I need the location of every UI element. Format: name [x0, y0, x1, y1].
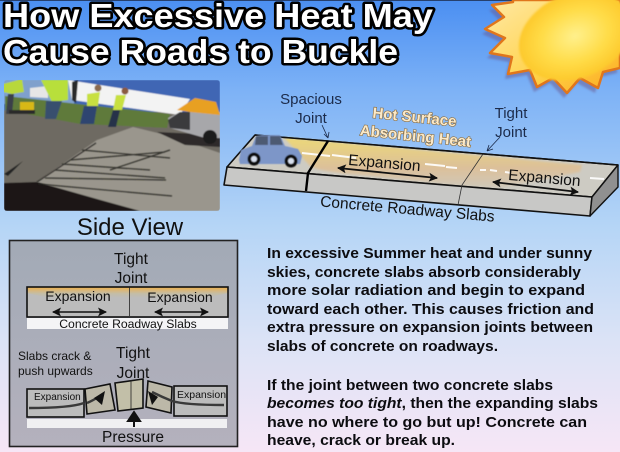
lower diagram: push upwards — [18, 364, 93, 378]
icon: sun — [482, 0, 620, 98]
expansion arrow left: Expansion — [348, 152, 421, 175]
expansion arrow right: Expansion — [508, 167, 581, 190]
explanatory text: skies, concrete slabs absorb considerably — [267, 264, 582, 281]
road top surface — [227, 135, 618, 197]
side view heading: Side View — [77, 214, 184, 241]
tight joint label: Tight — [495, 105, 528, 122]
explanatory text: more solar radiation and begin to expand — [267, 282, 585, 299]
upper diagram: Tight — [114, 251, 149, 268]
hot surface label — [359, 105, 472, 151]
lower diagram: Pressure — [102, 429, 164, 446]
tight joint label — [495, 105, 528, 141]
explanatory text — [267, 245, 598, 449]
photo: damaged road with workers — [3, 79, 220, 211]
explanatory text: toward each other. This causes friction and — [267, 301, 594, 318]
spacious joint label — [280, 91, 342, 127]
spacious joint label: Joint — [295, 110, 328, 127]
upper diagram: Expansion — [45, 288, 111, 304]
explanatory text: becomes too tight , then the expanding slabs — [267, 395, 598, 412]
hot surface label: Absorbing Heat — [359, 122, 472, 151]
pressure arrow — [128, 412, 140, 427]
lower diagram: Expansion — [34, 392, 81, 403]
upper diagram — [27, 251, 228, 331]
arrow to spacious joint — [322, 125, 329, 138]
upper diagram: Concrete Roadway Slabs — [59, 317, 197, 331]
explanatory text: extra pressure on expansion joints between — [267, 319, 593, 336]
road top edge — [255, 135, 618, 165]
explanatory text: have no where to go but up! Concrete can — [267, 414, 587, 431]
tight joint — [458, 154, 483, 205]
lower diagram: Joint — [117, 365, 150, 382]
panel: side view — [10, 240, 238, 446]
road front face — [224, 167, 592, 216]
hot surface label: Hot Surface — [372, 105, 457, 130]
title — [3, 0, 434, 70]
road slabs label: Concrete Roadway Slabs — [320, 193, 495, 226]
expansion arrow left — [338, 152, 437, 178]
heated surface area — [284, 138, 582, 188]
spacious joint label: Spacious — [280, 91, 342, 108]
centre road dashes — [302, 153, 604, 179]
explanatory text: heave, crack or break up. — [267, 432, 455, 449]
lower diagram: Expansion — [177, 389, 226, 401]
title: Cause Roads to Buckle — [3, 33, 398, 70]
road end face — [590, 165, 618, 216]
explanatory text: If the joint between two concrete slabs — [267, 377, 553, 394]
explanatory text: In excessive Summer heat and under sunny — [267, 245, 593, 262]
lower diagram: Slabs crack & — [18, 349, 91, 363]
icon: car — [239, 135, 302, 168]
explanatory text: slabs of concrete on roadways. — [267, 338, 498, 355]
spacious joint — [306, 141, 328, 191]
upper diagram: Joint — [115, 270, 148, 287]
upper diagram: Expansion — [147, 289, 213, 305]
arrow to tight joint — [487, 137, 500, 151]
road 3D diagram — [224, 91, 618, 226]
tight joint label: Joint — [495, 124, 528, 141]
lower diagram — [18, 345, 227, 446]
lower diagram: Tight — [116, 345, 151, 362]
